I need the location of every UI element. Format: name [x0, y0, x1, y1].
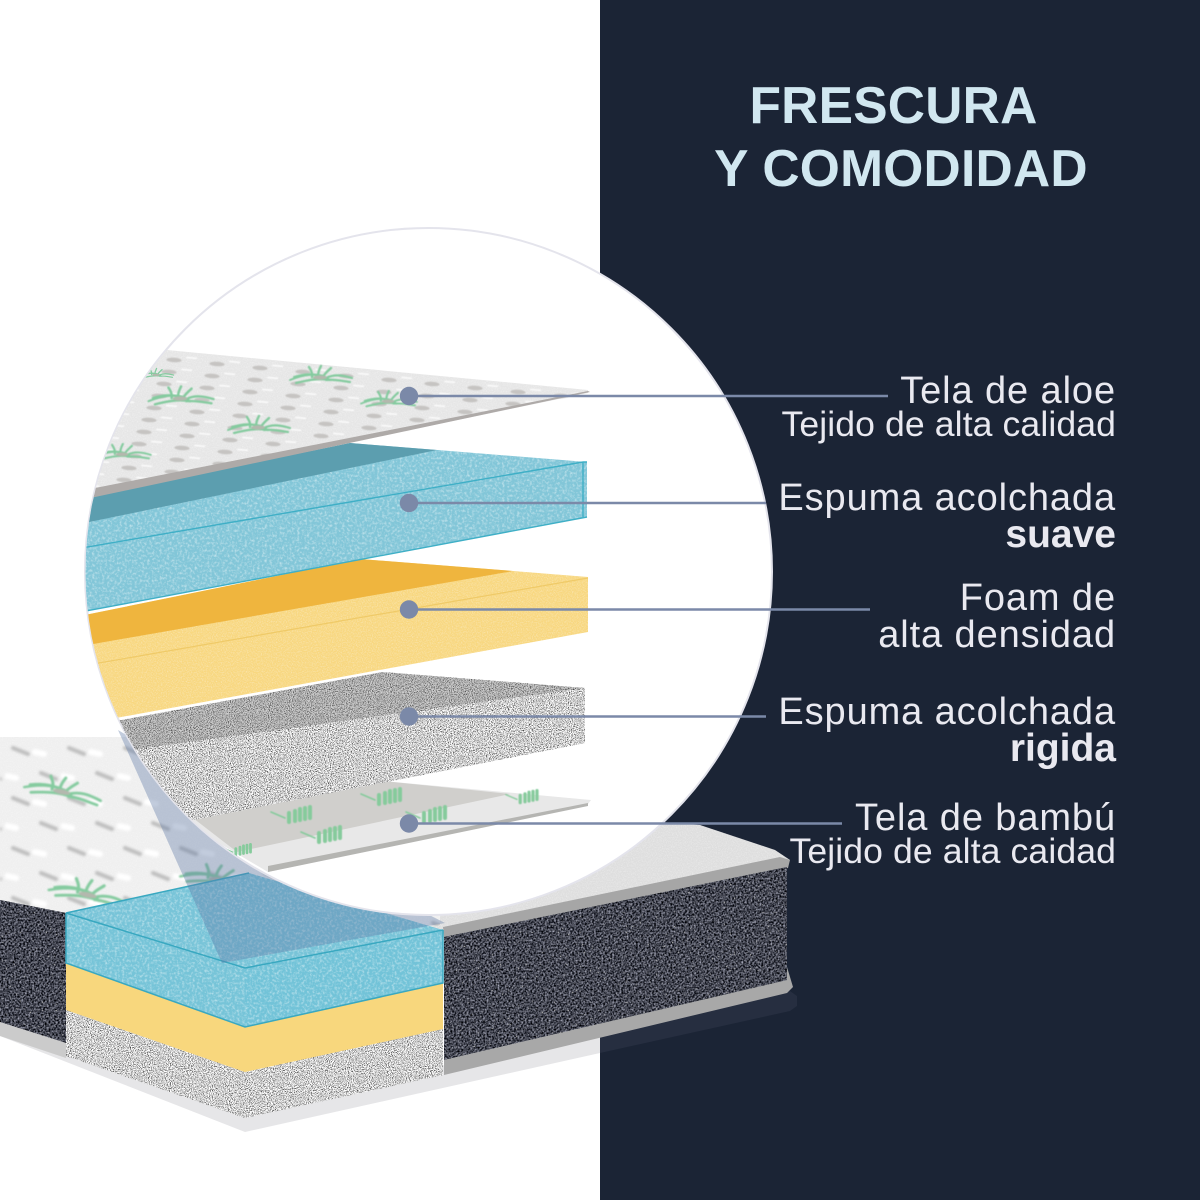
label: Espuma acolchada rigida: Espuma acolchada [778, 691, 1116, 733]
leader: Tela de aloe [400, 387, 888, 405]
layer: yellow high density foam [70, 559, 588, 725]
grey bottom binding right [444, 967, 793, 1075]
base mattress [0, 737, 797, 1132]
label: Espuma acolchada rigida: rigida [1010, 727, 1116, 770]
cutaway: blue foam [66, 873, 443, 1027]
floor shadow [0, 991, 797, 1132]
dark knit side right [444, 867, 787, 1060]
label: Foam de alta densidad: Foam de [960, 577, 1116, 619]
label: Tela de bambu [790, 797, 1116, 871]
label: Tela de bambu: Tejido de alta caidad [790, 831, 1116, 871]
layer: bamboo fabric [180, 781, 591, 872]
label: Tela de aloe: Tela de aloe [900, 370, 1116, 412]
cutaway: yellow foam [66, 963, 443, 1072]
label: Tela de aloe [782, 370, 1116, 444]
leader: Tela de bambu [400, 814, 842, 833]
label: Espuma acolchada rigida [778, 691, 1116, 770]
zoom cone [118, 730, 445, 963]
title: Y COMODIDAD [714, 139, 1088, 197]
cutaway: grey foam [66, 1010, 443, 1118]
label: Espuma acolchada suave: Espuma acolchada [778, 477, 1116, 519]
title: FRESCURA [749, 76, 1038, 134]
leader: Espuma acolchada rigida [400, 707, 766, 726]
label: Foam de alta densidad [878, 577, 1116, 656]
layer: aloe fabric [80, 350, 590, 500]
leader: Foam de alta densidad [400, 600, 870, 619]
grey top binding right [443, 857, 790, 938]
leader: Espuma acolchada suave [400, 494, 766, 512]
magnifier circle [85, 228, 772, 915]
label: Espuma acolchada suave: suave [1005, 513, 1116, 556]
layer: grey rigid foam [100, 672, 585, 820]
label: Tela de aloe: Tejido de alta calidad [782, 404, 1116, 444]
mattress top surface [0, 737, 790, 930]
label: Tela de bambu: Tela de bambú [855, 797, 1116, 839]
label: Espuma acolchada suave [778, 477, 1116, 556]
label: Foam de alta densidad: alta densidad [878, 614, 1116, 656]
dark knit side left [0, 900, 66, 1058]
title [714, 76, 1088, 197]
exploded layers [70, 350, 591, 872]
layer: blue soft foam [70, 443, 587, 614]
